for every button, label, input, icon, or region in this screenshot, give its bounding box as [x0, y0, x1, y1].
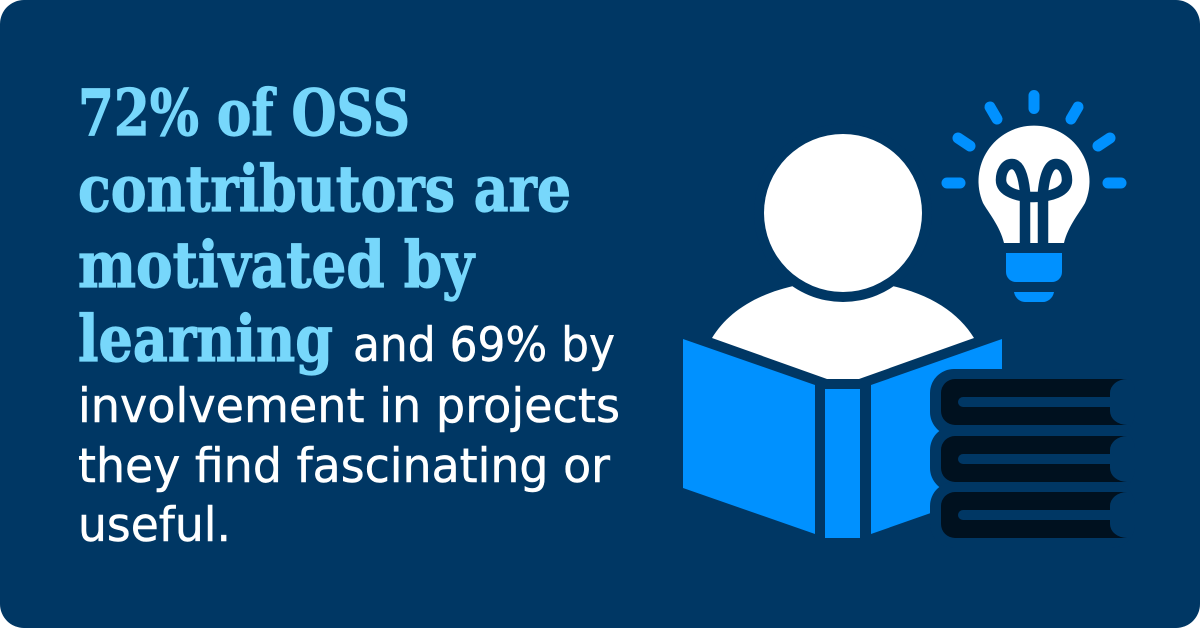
top book [941, 379, 1128, 425]
text block: statistic statement [78, 76, 620, 553]
icon: person head [764, 134, 922, 292]
heading line: 72% of OSS: 72% of OSS [78, 76, 410, 151]
icon: person reading [712, 124, 974, 379]
bulb filament [1001, 164, 1067, 243]
heading line: learning: learning [78, 302, 333, 377]
heading line: motivated by: motivated by [78, 228, 476, 303]
body line: and 69% by: and 69% by [353, 318, 615, 373]
book spine [825, 389, 860, 538]
body line: useful.: useful. [78, 498, 231, 553]
book right page [871, 339, 1002, 534]
middle book [941, 436, 1128, 482]
heading line: contributors are: contributors are [78, 152, 571, 227]
book stack halo [930, 369, 1135, 548]
icon: head gap [754, 124, 932, 302]
icon: stack of books [930, 369, 1135, 548]
icon: light bulb [947, 96, 1121, 302]
bulb rays [947, 96, 1121, 183]
bulb base [1006, 253, 1062, 282]
icon: person shoulders [712, 280, 974, 379]
icon: open book [683, 339, 1002, 538]
body line: involvement in projects: involvement in projects [78, 379, 620, 434]
bulb tip [1014, 292, 1054, 302]
book left page [683, 339, 815, 534]
bulb glass [978, 126, 1090, 243]
body line: they find fascinating or: they find fascinating or [78, 439, 611, 494]
bottom book [941, 492, 1128, 538]
